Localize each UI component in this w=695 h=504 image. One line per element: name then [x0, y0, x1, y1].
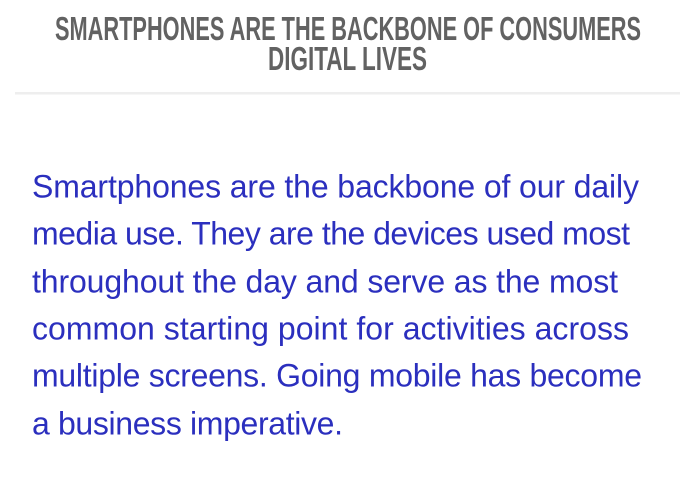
body paragraph: common starting point for activities across — [32, 310, 629, 346]
title — [55, 10, 641, 77]
body paragraph: multiple screens. Going mobile has become — [32, 358, 642, 394]
body paragraph: a business imperative. — [32, 406, 343, 442]
title: DIGITAL LIVES — [268, 40, 427, 77]
body paragraph: throughout the day and serve as the most — [32, 264, 618, 300]
body paragraph: media use. They are the devices used most — [32, 216, 630, 252]
body paragraph: Smartphones are the backbone of our daily — [32, 168, 639, 204]
body paragraph — [32, 168, 642, 442]
